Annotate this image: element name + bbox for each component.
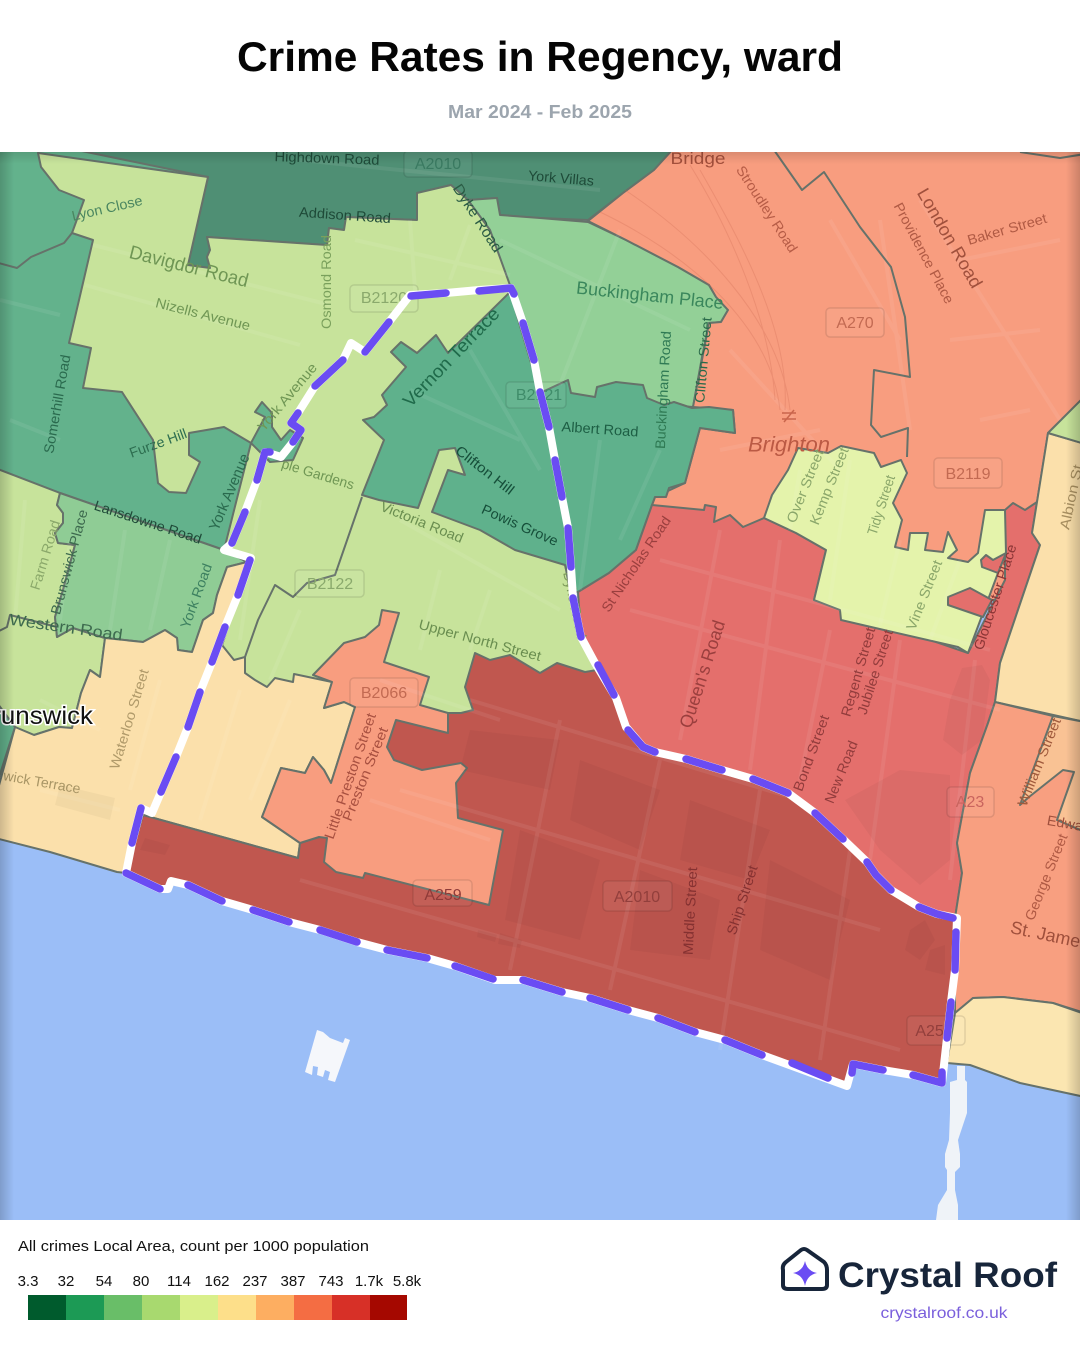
street labels: William Street xyxy=(1014,715,1064,809)
faint street network and parks xyxy=(0,160,1060,1060)
shield: B2122: B2122 xyxy=(307,576,353,593)
area: western green xyxy=(0,152,250,548)
street labels: Lyon Close xyxy=(70,192,144,224)
area: dark red Regency centre xyxy=(126,653,955,1086)
street labels: Albert Road xyxy=(561,418,639,440)
street labels: Clifton Street xyxy=(691,316,715,404)
park and building tints xyxy=(56,666,990,884)
area: red pocket in yellow-green xyxy=(948,588,992,617)
legend value labels: 3.3 xyxy=(18,1273,38,1290)
logo: Crystal Roof xyxy=(783,1249,1057,1322)
street labels: Brunswick Place xyxy=(47,508,91,616)
street labels: Upper North Street xyxy=(417,616,543,664)
street labels: Vine Street xyxy=(903,558,945,632)
legend value labels: 387 xyxy=(280,1273,306,1290)
area: red central xyxy=(578,502,1040,918)
street labels: Addison Road xyxy=(299,204,391,226)
street labels: wick Terrace xyxy=(1,767,82,797)
street labels: Waterloo Street xyxy=(106,667,152,771)
area: cream west xyxy=(0,562,355,873)
legend value labels: 80 xyxy=(133,1273,149,1290)
icon: railway station xyxy=(782,410,796,422)
shield: B2121 xyxy=(506,382,566,408)
shield: B2121: B2121 xyxy=(516,387,562,404)
legend value labels: 1.7k xyxy=(355,1273,384,1290)
shield: A23 xyxy=(947,787,994,817)
street labels: Furze Hill xyxy=(127,425,189,461)
subtitle: date range: Mar 2024 - Feb 2025 xyxy=(448,102,632,122)
street labels: Lansdowne Road xyxy=(92,497,204,547)
shield: B2119 xyxy=(934,458,1002,488)
shield: A259 west xyxy=(413,880,472,906)
shield: A2010 north: A2010 xyxy=(415,156,461,173)
street labels: York Road xyxy=(177,561,215,631)
legend value labels: 237 xyxy=(242,1273,268,1290)
street labels: Stroudley Road xyxy=(733,163,801,255)
sea xyxy=(0,152,1080,1220)
shield: A23: A23 xyxy=(956,794,984,811)
area: far-left green strip xyxy=(0,705,16,777)
street labels xyxy=(1,148,1080,955)
shield: A270: A270 xyxy=(836,315,874,332)
area: south-east peach patch xyxy=(1020,716,1080,832)
street labels: Davigdor Road xyxy=(127,242,250,292)
road shields xyxy=(295,151,1002,1045)
street labels: Kemp Street xyxy=(806,445,852,527)
street labels: Clifton Hill xyxy=(453,442,518,498)
street labels: Bridge xyxy=(671,149,725,168)
street labels: Queen's Road xyxy=(675,618,729,730)
street labels: York Avenue xyxy=(206,451,254,533)
logo wordmark: Crystal Roof xyxy=(838,1256,1057,1295)
shield: A2010 south xyxy=(603,881,672,911)
legend value labels: 32 xyxy=(58,1273,74,1290)
area: Buckingham medium green xyxy=(468,198,728,407)
legend value labels: 5.8k xyxy=(393,1273,422,1290)
street labels: George Street xyxy=(1021,831,1071,923)
shield: B2120: B2120 xyxy=(361,290,407,307)
street labels: Buckingham Place xyxy=(575,278,725,313)
street labels: Western Road xyxy=(8,612,123,644)
area: western light green xyxy=(0,468,105,790)
street labels: Victoria Road xyxy=(378,498,466,546)
street labels: Brighton xyxy=(748,433,830,456)
street labels: St Nicholas Road xyxy=(598,513,674,615)
street labels: Dyke Road xyxy=(449,181,506,256)
legend value labels: 743 xyxy=(318,1273,344,1290)
street labels: York Villas xyxy=(527,167,595,189)
area: dark green north xyxy=(67,148,674,268)
street labels: Providence Place xyxy=(891,200,958,306)
legend value labels: 114 xyxy=(167,1273,191,1290)
area: far-east light green patch xyxy=(1048,396,1080,444)
street labels: Middle Street xyxy=(680,867,700,955)
street labels: ple Gardens xyxy=(280,455,356,493)
area: Brunswick medium green xyxy=(55,493,247,652)
street labels: Osmond Road xyxy=(318,235,334,329)
shield: B2120 xyxy=(350,285,418,312)
ward boundary: Regency (white line with purple dashes) xyxy=(126,288,957,1086)
street labels: Preston Street xyxy=(339,725,391,823)
area: Preston Street orange xyxy=(262,610,503,905)
street labels: Gloucester Place xyxy=(970,542,1020,652)
street labels: New Road xyxy=(821,738,861,806)
street labels: Little Preston Street xyxy=(321,711,379,841)
legend value labels: 162 xyxy=(204,1273,230,1290)
shield: B2066: B2066 xyxy=(361,685,407,702)
area: north-east orange xyxy=(588,148,1080,600)
street labels: Dyke Road xyxy=(560,570,590,640)
legend colour scale xyxy=(28,1295,407,1320)
street labels: Highdown Road xyxy=(274,148,380,168)
area: light yellow-green Kemp Town pocket xyxy=(764,446,1006,653)
shield: A259 east xyxy=(907,1016,965,1045)
railway tracks into Brighton station xyxy=(600,165,790,410)
street labels: York Avenue xyxy=(254,359,320,434)
street labels: Farm Road xyxy=(27,518,63,592)
street labels: Buckingham Road xyxy=(652,331,674,449)
logo url: crystalroof.co.uk xyxy=(880,1305,1009,1322)
shield: B2122 xyxy=(295,570,364,597)
legend value labels xyxy=(18,1273,422,1290)
area: south-east orange xyxy=(955,702,1080,1013)
area: Davigdor and central light green xyxy=(38,153,597,750)
area: red notch in yellow-green xyxy=(981,553,1006,573)
street labels: Baker Street xyxy=(965,210,1049,248)
pier: palace pier xyxy=(936,1066,967,1220)
area: small green pocket by York Avenue xyxy=(251,402,303,462)
street labels: Vernon Terrace xyxy=(399,304,504,411)
street labels: Ship Street xyxy=(723,863,761,937)
shield: A270 xyxy=(826,308,884,337)
street labels: Over Street xyxy=(783,447,827,525)
street labels: Tidy Street xyxy=(864,473,898,537)
map edge shading xyxy=(0,152,1080,1220)
shield: A259 east: A259 xyxy=(915,1023,953,1040)
area: cream east xyxy=(995,433,1080,722)
legend value labels: 54 xyxy=(96,1273,112,1290)
street labels: London Road xyxy=(913,185,986,292)
shield: A259 west: A259 xyxy=(424,887,462,904)
street labels: Jubilee Street xyxy=(854,628,896,716)
area: beach cream xyxy=(947,997,1080,1097)
pier: west pier ruin xyxy=(305,1030,350,1082)
legend title: All crimes Local Area, count per 1000 population xyxy=(18,1238,369,1255)
legend xyxy=(18,1238,422,1320)
street labels: Somerhill Road xyxy=(40,353,73,455)
street labels: Regent Street xyxy=(838,625,878,718)
street labels: Nizells Avenue xyxy=(154,294,252,333)
shield: A2010 south: A2010 xyxy=(614,889,660,906)
title: Crime Rates in Regency, ward xyxy=(237,33,843,80)
street labels: Powis Grove xyxy=(479,501,561,549)
icon: house with star xyxy=(783,1249,827,1289)
ward outline: purple dashes xyxy=(126,288,956,1083)
inner boundaries xyxy=(0,150,1080,657)
street labels: Bond Street xyxy=(790,713,832,793)
area: Vernon Terrace and Albert Road green xyxy=(362,292,735,592)
choropleth map panel xyxy=(0,148,1080,1220)
shield: B2066 xyxy=(350,678,418,707)
ward outline: white xyxy=(126,288,957,1086)
shield: A2010 north xyxy=(404,151,472,177)
shield: B2119: B2119 xyxy=(945,466,991,483)
